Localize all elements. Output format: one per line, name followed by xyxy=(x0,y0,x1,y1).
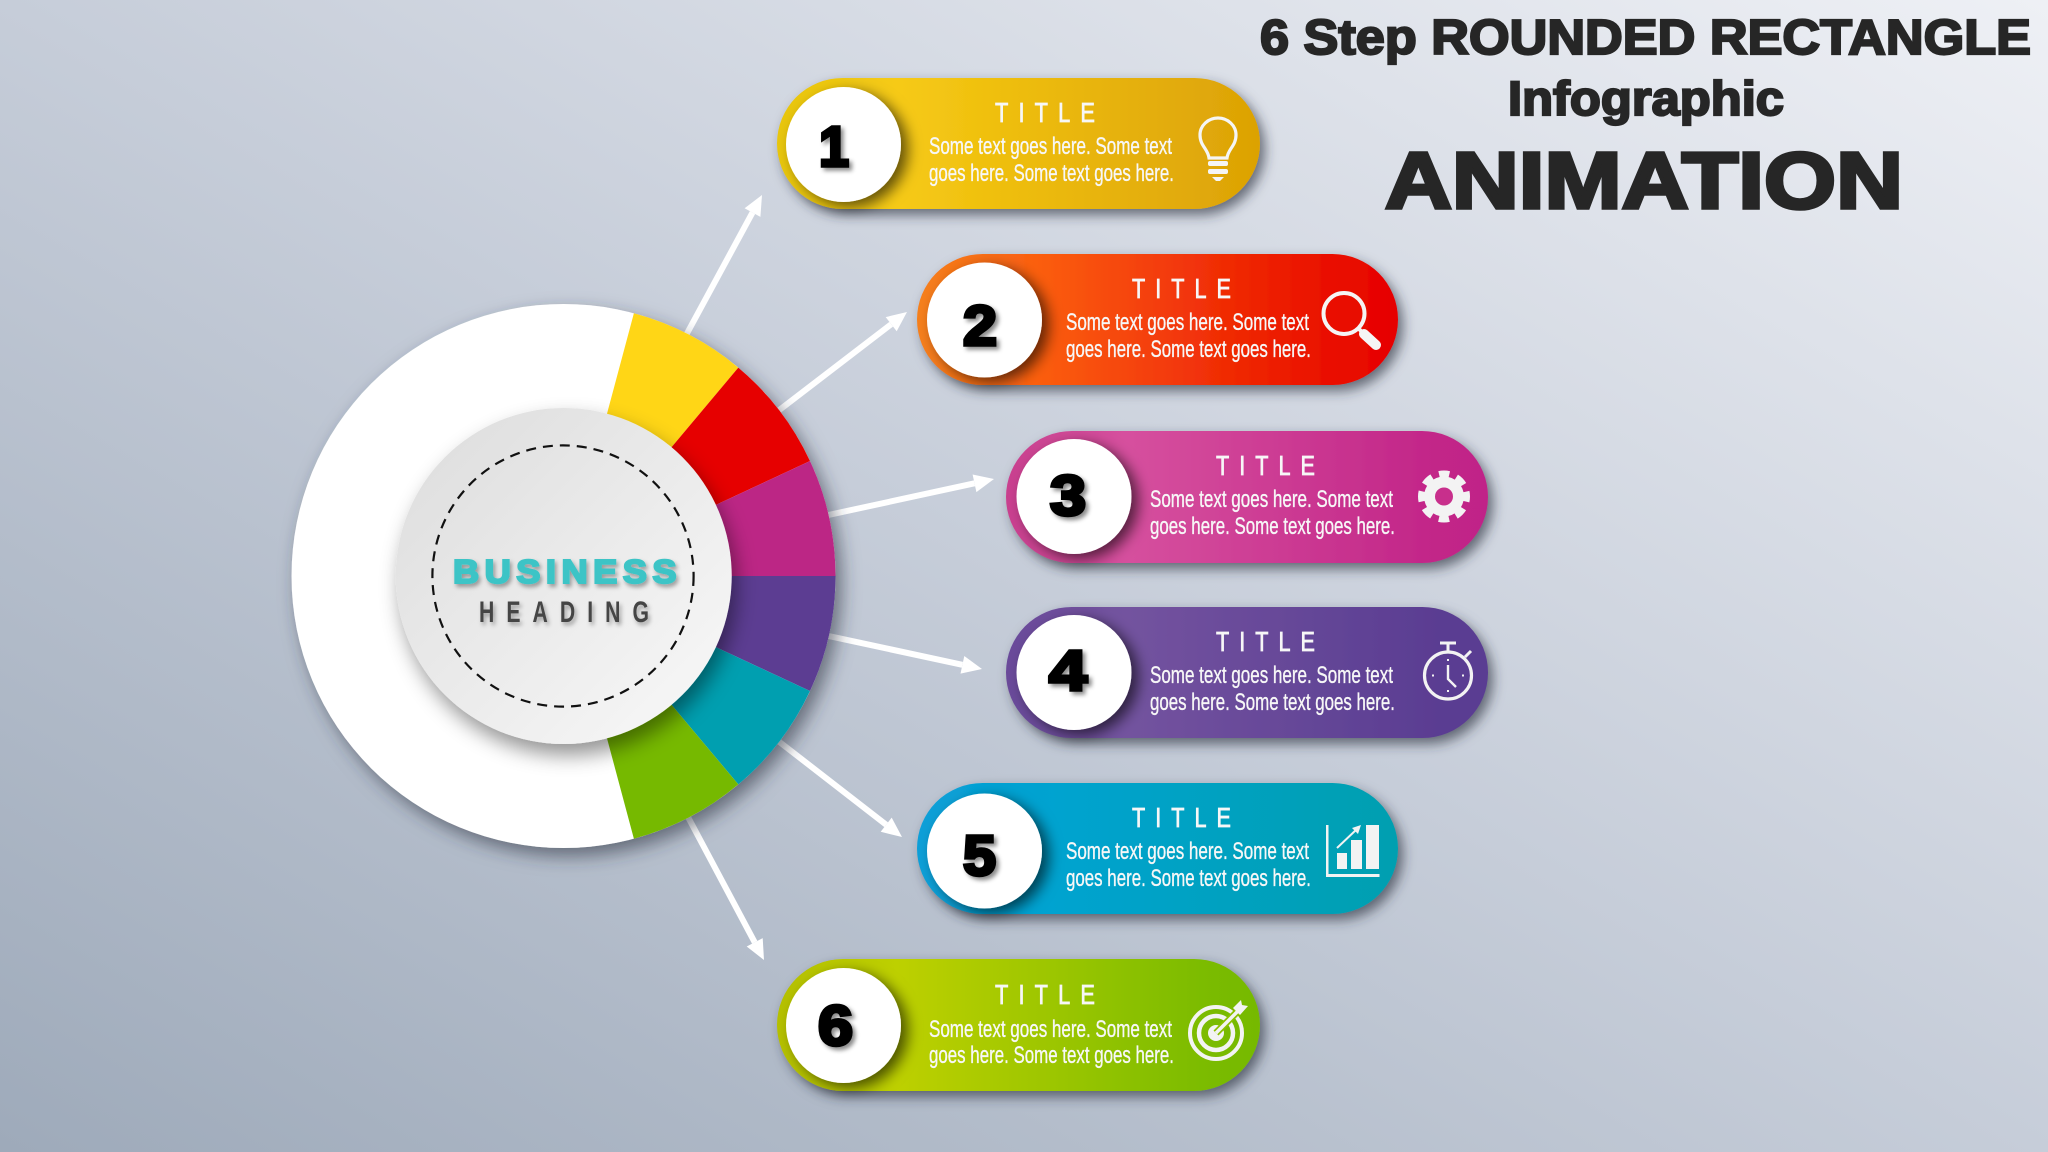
body 4 xyxy=(1150,662,1395,716)
body 3 xyxy=(1150,486,1395,540)
number 1: 1 xyxy=(819,115,849,179)
body 4: Some text goes here. Some text xyxy=(1150,662,1393,689)
pill 1 xyxy=(777,78,1260,209)
arrow 5 xyxy=(764,730,902,837)
arrow 1 xyxy=(678,195,762,350)
pill 5 xyxy=(917,783,1398,914)
body 1 xyxy=(929,133,1174,187)
number circle 1 xyxy=(786,87,901,202)
icon: target xyxy=(1190,1000,1248,1059)
icon: gear xyxy=(1422,474,1466,518)
body 6 xyxy=(929,1016,1174,1069)
inner grey circle xyxy=(396,408,732,744)
number 6: 6 xyxy=(818,994,853,1058)
dashed ring xyxy=(432,445,694,707)
capsule 1 xyxy=(777,78,1260,209)
title 4: TITLE xyxy=(1216,626,1325,657)
title 1: TITLE xyxy=(995,97,1105,128)
capsule 5 xyxy=(917,783,1398,914)
heading line 2: Infographic xyxy=(1508,73,1784,126)
heading line 1: 6 Step ROUNDED RECTANGLE xyxy=(1260,11,2031,65)
body 3: goes here. Some text goes here. xyxy=(1150,513,1395,540)
icon: bar chart xyxy=(1326,825,1380,877)
icon: light bulb xyxy=(1200,118,1236,181)
business label: BUSINESS xyxy=(453,553,682,590)
body 5: Some text goes here. Some text xyxy=(1066,838,1309,865)
body 6: goes here. Some text goes here. xyxy=(929,1042,1174,1069)
wedge yellow xyxy=(564,313,738,576)
body 5: goes here. Some text goes here. xyxy=(1066,865,1311,892)
heading line 3: ANIMATION xyxy=(1385,136,1903,225)
number circle 3 xyxy=(1016,439,1132,554)
pill 2 xyxy=(917,254,1398,385)
wedge magenta xyxy=(564,461,836,576)
number 4: 4 xyxy=(1049,639,1087,703)
arrow 4 xyxy=(810,632,982,674)
capsule 2 xyxy=(917,254,1398,385)
icon: stopwatch xyxy=(1424,643,1472,699)
pill 4 xyxy=(1006,607,1488,738)
arrow 3 xyxy=(810,474,994,519)
body 2: Some text goes here. Some text xyxy=(1066,309,1309,336)
wedge purple xyxy=(564,576,836,691)
white outer disc xyxy=(292,304,836,848)
heading label: HEADING xyxy=(479,596,661,629)
body 1: goes here. Some text goes here. xyxy=(929,160,1174,187)
number 3: 3 xyxy=(1050,464,1086,528)
title 2: TITLE xyxy=(1132,273,1241,304)
arrow 6 xyxy=(680,802,764,960)
pill 3 xyxy=(1006,431,1488,563)
number circle 4 xyxy=(1016,615,1132,730)
number 2: 2 xyxy=(963,294,997,358)
pill 6 xyxy=(777,959,1260,1091)
capsule 6 xyxy=(777,959,1260,1091)
number circle 6 xyxy=(786,968,901,1083)
title 6: TITLE xyxy=(995,979,1105,1010)
body 1: Some text goes here. Some text xyxy=(929,133,1172,160)
number 5: 5 xyxy=(963,824,996,888)
capsule 4 xyxy=(1006,607,1488,738)
central disc with coloured wedges xyxy=(292,304,836,848)
wedge green xyxy=(564,576,738,839)
body 3: Some text goes here. Some text xyxy=(1150,486,1393,513)
arrows from disc to pills xyxy=(678,195,994,960)
body 6: Some text goes here. Some text xyxy=(929,1016,1172,1043)
wedge teal xyxy=(564,576,810,784)
heading: 6 Step Rounded Rectangle Infographic Animation xyxy=(1260,11,2031,225)
title 3: TITLE xyxy=(1216,450,1325,481)
arrow 2 xyxy=(765,312,907,421)
body 2: goes here. Some text goes here. xyxy=(1066,336,1311,363)
number circle 5 xyxy=(927,794,1042,908)
body 5 xyxy=(1066,838,1311,892)
title 5: TITLE xyxy=(1132,802,1241,833)
capsule 3 xyxy=(1006,431,1488,563)
wedge red xyxy=(564,368,810,576)
body 4: goes here. Some text goes here. xyxy=(1150,689,1395,716)
body 2 xyxy=(1066,309,1311,363)
number circle 2 xyxy=(927,262,1042,378)
icon: magnifier xyxy=(1324,293,1376,345)
